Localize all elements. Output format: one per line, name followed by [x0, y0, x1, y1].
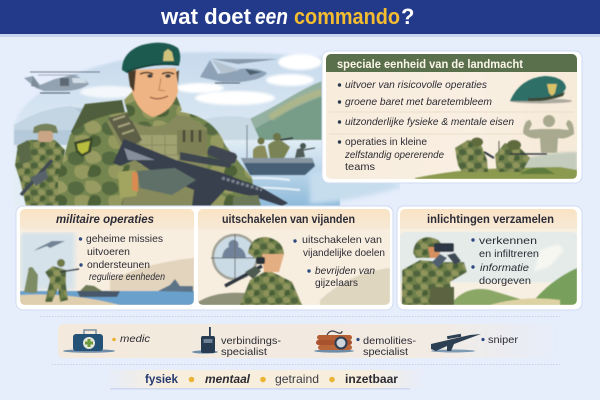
- panel: inlichtingen verzamelen: informatie: [480, 262, 529, 274]
- icon: sniper rifle: [431, 334, 481, 352]
- title banner: ?: [401, 4, 414, 29]
- card: uitschakelen van vijanden: uitschakelen van vijanden: [222, 214, 355, 226]
- panel heading: [326, 54, 577, 72]
- scene: beach landing: [20, 232, 194, 305]
- rifle: [113, 139, 288, 206]
- shoulder patch: [74, 137, 93, 157]
- icon: medic kit: [63, 330, 115, 353]
- helicopter left: [24, 72, 100, 93]
- verbindingsspecialist label: verbindings-: [221, 335, 282, 347]
- specialist roles strip: [58, 324, 560, 358]
- qualities bar: getraind: [275, 372, 319, 386]
- qualities bar: mentaal: [205, 372, 251, 386]
- title banner: [0, 0, 600, 37]
- neck and face: [124, 92, 182, 127]
- card heading: inlichtingen verzamelen: [427, 214, 554, 226]
- backpack: [70, 99, 126, 134]
- gloves: [118, 170, 137, 198]
- card: uitschakelen van vijanden: bevrijden van: [315, 265, 375, 277]
- hero illustration: commando in landscape: [14, 43, 405, 206]
- panel: inlichtingen verzamelen: verkennen: [479, 235, 537, 247]
- verbindingsspecialist label: specialist: [221, 346, 267, 358]
- scene: sniper soldier with scope: [198, 234, 390, 305]
- card: militaire operaties: [20, 209, 194, 305]
- title banner: commando: [294, 4, 400, 29]
- card: uitschakelen van vijanden: uitschakelen van: [302, 234, 382, 246]
- demolitiespecialist label: demolities-: [363, 335, 417, 347]
- verbindingsspecialist label: [221, 335, 282, 358]
- panel: speciale eenheid van de landmacht: [322, 51, 582, 183]
- card: militaire operaties: militaire operaties: [56, 214, 154, 226]
- card: militaire operaties: uitvoeren: [87, 246, 130, 258]
- card: militaire operaties: geheime missies: [86, 233, 163, 245]
- bullet list: [338, 79, 514, 173]
- panel heading: speciale eenheid van de landmacht: [337, 57, 523, 71]
- bullet list: teams: [345, 161, 375, 173]
- panel: inlichtingen verzamelen: [397, 206, 582, 310]
- bullet list: zelfstandig opererende: [344, 149, 444, 161]
- panel: inlichtingen verzamelen: doorgeven: [479, 275, 531, 287]
- torso and arms: [58, 112, 256, 206]
- demolitiespecialist label: specialist: [363, 346, 408, 358]
- bullet list: uitvoer van risicovolle operaties: [345, 79, 488, 91]
- demolitiespecialist label: [356, 335, 417, 358]
- scene: soldier with binoculars: [400, 232, 577, 305]
- helicopter right: [200, 59, 278, 83]
- title banner: een: [255, 4, 288, 29]
- bullet list: groene baret met baretembleem: [345, 96, 492, 108]
- icon: green beret: [510, 76, 572, 104]
- boat with soldiers: [241, 125, 315, 175]
- illustration: two soldiers in grass: [415, 138, 577, 179]
- landscape background: [14, 52, 405, 206]
- title banner: wat doet: [160, 4, 252, 29]
- main soldier: [58, 43, 288, 206]
- vest: [107, 112, 208, 206]
- icon: strong silhouette: [523, 115, 574, 153]
- qualities bar: [105, 370, 425, 390]
- icon: radio: [192, 327, 218, 354]
- card: uitschakelen van vijanden: gijzelaars: [315, 277, 358, 289]
- bullet list: uitzonderlijke fysieke & mentale eisen: [345, 116, 514, 128]
- card: militaire operaties: reguliere eenheden: [89, 271, 165, 283]
- card: uitschakelen van vijanden: [198, 209, 390, 305]
- sniper label: sniper: [488, 334, 519, 346]
- qualities bar: inzetbaar: [345, 372, 398, 386]
- medic label: medic: [120, 333, 151, 345]
- qualities bar: fysiek: [145, 372, 178, 386]
- panel: main mission cards group: [16, 206, 393, 310]
- beret: [122, 43, 180, 73]
- bullet list: operaties in kleine: [345, 136, 427, 148]
- card: militaire operaties: ondersteunen: [87, 259, 150, 271]
- panel: inlichtingen verzamelen: en infiltreren: [479, 248, 539, 260]
- soldier left background: [15, 124, 65, 206]
- card: uitschakelen van vijanden: vijandelijke doelen: [303, 247, 385, 259]
- icon: demolition charges: [314, 331, 354, 353]
